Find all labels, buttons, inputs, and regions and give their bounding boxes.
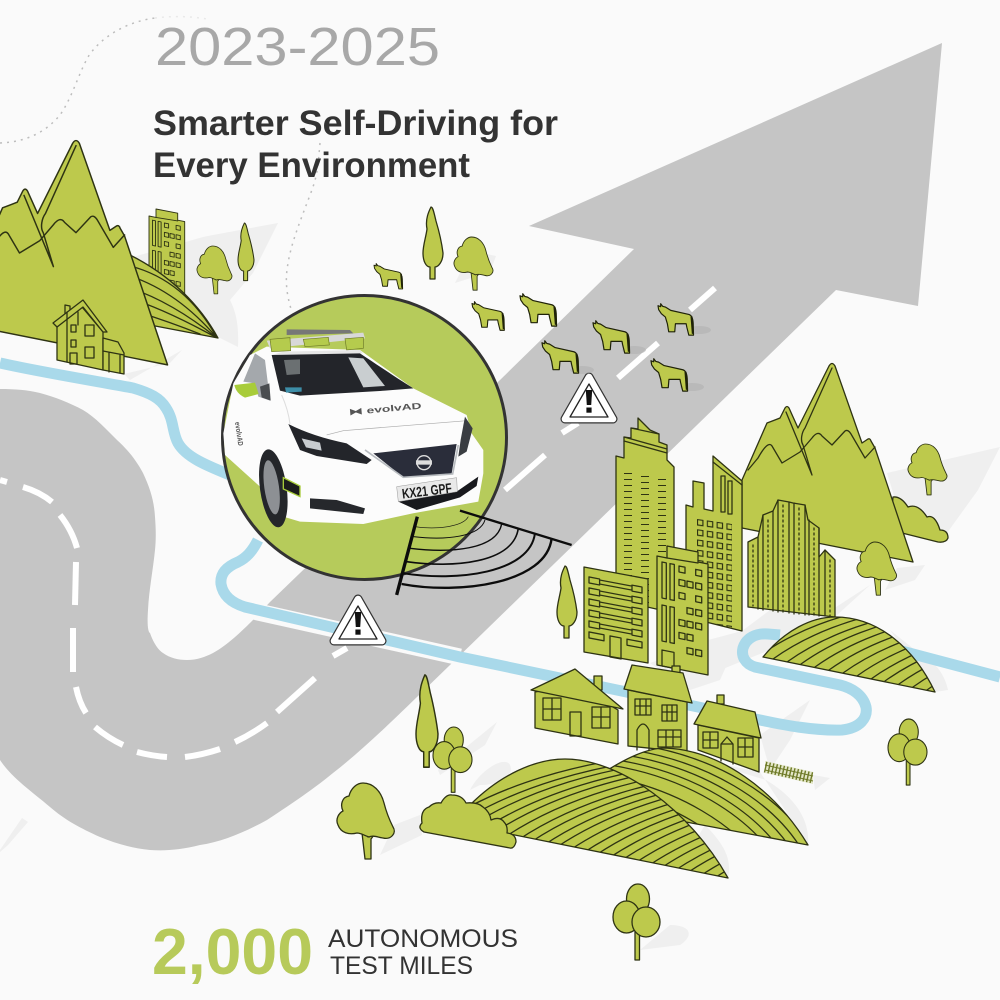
date heading: 2023-2025 — [155, 17, 440, 77]
house 3 — [694, 695, 761, 772]
main title: Smarter Self-Driving for — [153, 104, 558, 143]
side window — [243, 353, 270, 401]
wheel — [259, 449, 288, 528]
ribbed skyscraper — [748, 500, 835, 617]
striped hill on river — [762, 616, 936, 693]
picket fence — [765, 761, 813, 784]
left tower building — [149, 209, 185, 299]
left mountain — [0, 141, 168, 365]
road centre dashes — [0, 288, 715, 757]
car photo illustration — [223, 329, 483, 529]
river — [0, 363, 1000, 730]
grille — [373, 444, 457, 477]
dotted route lines — [0, 17, 320, 312]
left striped hill — [130, 255, 218, 338]
left house — [53, 300, 124, 374]
side marker — [283, 478, 300, 497]
stat: 2,000 autonomous test miles — [152, 915, 518, 988]
right headlight — [458, 417, 473, 457]
front tower block — [657, 546, 708, 675]
logo on hood: ⧓ evolvAD — [349, 401, 422, 417]
main title: Every Environment — [153, 146, 470, 185]
nissan emblem — [416, 456, 432, 470]
city skyline — [584, 418, 835, 675]
logo on door: evolvAD — [233, 421, 245, 446]
green circle — [222, 296, 506, 580]
office block — [584, 567, 648, 663]
number plate — [397, 478, 457, 502]
bush — [420, 795, 516, 848]
village houses — [531, 665, 761, 772]
wing mirror — [234, 383, 259, 398]
warning sign at river — [334, 599, 382, 641]
front hill — [472, 758, 729, 879]
left landscape: mountains, building, hill, house — [0, 141, 218, 374]
back hill — [610, 748, 809, 846]
car body — [223, 347, 483, 524]
striped hills in foreground — [419, 748, 809, 879]
right bush — [890, 497, 948, 542]
trees — [197, 207, 947, 960]
windowed tower with slanted top — [686, 456, 742, 631]
car circle badge — [222, 296, 572, 595]
hood crease — [327, 421, 467, 435]
fog light — [310, 498, 365, 514]
house 1 — [531, 669, 623, 744]
headlight — [288, 424, 372, 464]
stat label: AUTONOMOUS — [328, 925, 518, 953]
roof sensors — [267, 329, 365, 355]
road: arrow shaft, curve and arrowhead — [0, 43, 942, 850]
ground shadows — [0, 223, 1000, 950]
windscreen — [272, 353, 413, 396]
stat number: 2,000 — [152, 915, 313, 988]
right mountain — [742, 364, 913, 562]
tall skyscraper — [616, 418, 674, 613]
stat label: TEST MILES — [330, 952, 473, 980]
cows — [374, 264, 711, 391]
lower bumper — [398, 477, 478, 510]
radar arcs — [397, 511, 572, 595]
tree in front of mountain — [857, 542, 897, 595]
plate text: KX21 GPF — [401, 480, 453, 502]
warning sign on road — [565, 377, 613, 419]
house 2 — [624, 665, 692, 752]
